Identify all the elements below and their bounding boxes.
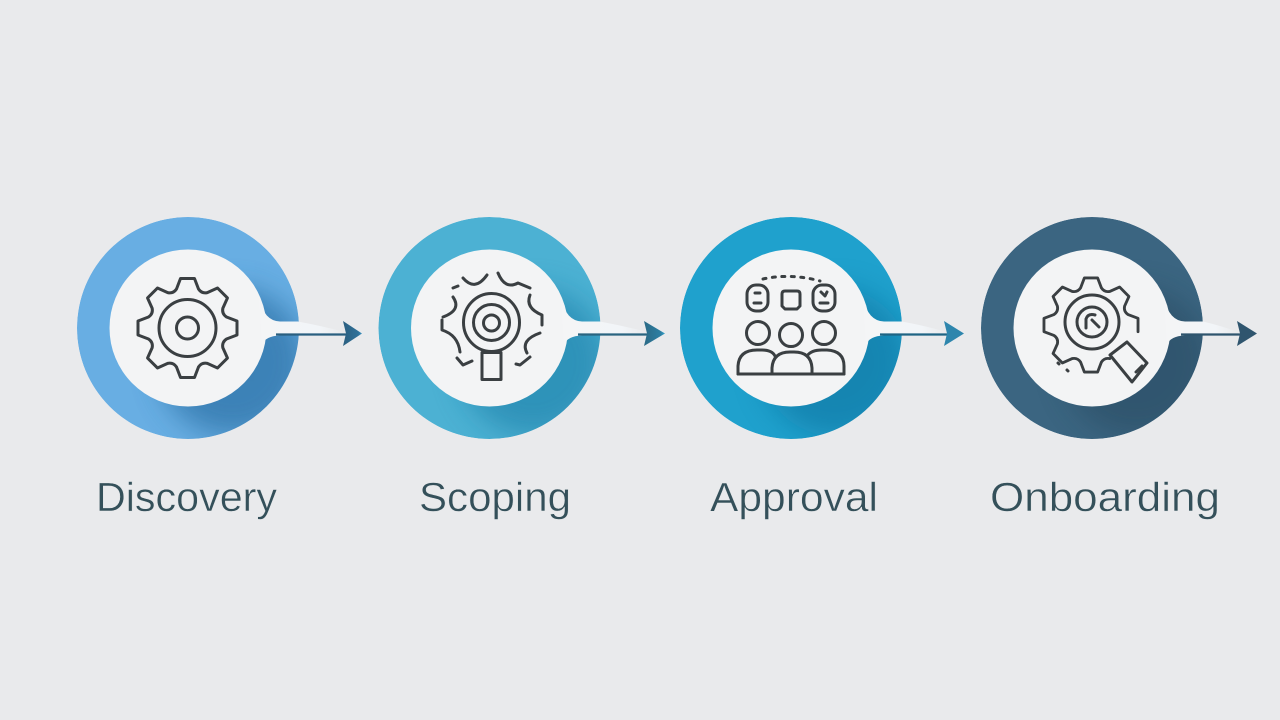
label: Approval: Approval — [710, 474, 878, 520]
arrow: Onboarding end — [1014, 250, 1257, 406]
arrow: Discovery to Scoping — [110, 250, 362, 406]
ring: Discovery — [77, 217, 306, 439]
step 2: Scoping — [378, 217, 665, 520]
ring: Scoping — [378, 217, 607, 439]
icon: team with approvers — [738, 276, 844, 374]
step 4: Onboarding — [981, 217, 1257, 520]
icon: gear under magnifier — [1044, 278, 1147, 382]
label: Scoping: Scoping — [419, 474, 571, 520]
label: Discovery: Discovery — [96, 474, 277, 520]
icon: gear — [138, 278, 237, 378]
arrow: Approval to Onboarding — [712, 250, 964, 406]
label: Onboarding: Onboarding — [990, 474, 1220, 520]
step 3: Approval — [680, 217, 964, 520]
ring: Onboarding — [981, 217, 1210, 439]
arrow: Scoping to Approval — [411, 250, 665, 406]
icon: magnifier with broken gear — [442, 273, 542, 380]
step 1: Discovery — [77, 217, 362, 520]
ring: Approval — [680, 217, 909, 439]
